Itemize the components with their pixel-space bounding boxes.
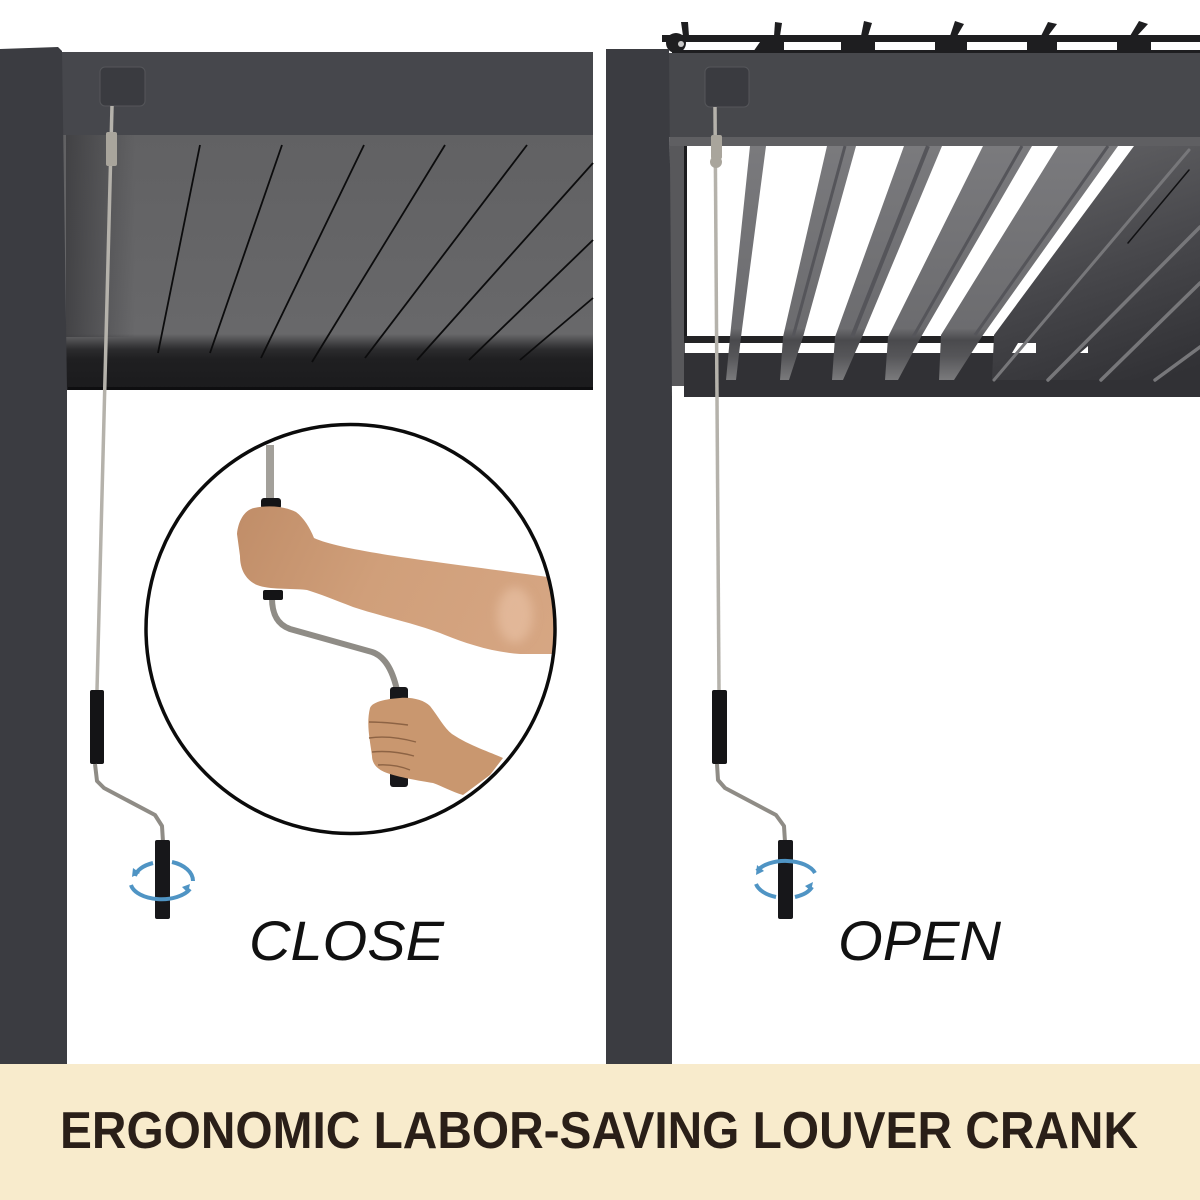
upper grip	[712, 690, 727, 764]
label: close: CLOSE	[249, 909, 445, 972]
crank rod	[715, 107, 719, 690]
crank arm	[717, 764, 785, 842]
lower grip	[390, 687, 408, 787]
label: open: OPEN	[838, 909, 1002, 972]
open louver slats	[670, 137, 1200, 397]
swivel hook	[106, 132, 117, 166]
crank mount box	[100, 67, 145, 106]
icon: rotation arrows	[131, 862, 193, 899]
lower grip	[155, 840, 170, 919]
footer banner	[0, 1064, 1200, 1200]
crank cap mid	[263, 590, 283, 600]
crank arm	[95, 764, 163, 842]
icon: rotation arrows	[756, 861, 815, 897]
crank bend	[272, 598, 397, 690]
panel: closed louver pergola	[0, 47, 593, 1064]
elbow shade	[497, 587, 533, 643]
crank rod	[97, 106, 112, 690]
top beam	[667, 53, 1200, 137]
finger lines	[369, 722, 416, 770]
lower hand	[368, 698, 503, 795]
top beam	[62, 52, 593, 135]
closed louver roof panel	[62, 135, 593, 390]
lower grip	[778, 840, 793, 919]
left post	[606, 49, 672, 1064]
swivel hook	[710, 135, 722, 168]
crank cap top	[261, 498, 281, 508]
heading: ERGONOMIC LABOR-SAVING LOUVER CRANK	[60, 1102, 1138, 1160]
top linkage rail	[662, 21, 1200, 53]
upper grip	[90, 690, 104, 764]
crank assembly: close side	[90, 106, 193, 919]
crank shaft	[266, 445, 274, 499]
crank mount box	[705, 67, 749, 107]
crank assembly: open side	[710, 107, 815, 919]
upper arm and fist	[237, 506, 562, 654]
left post	[0, 47, 67, 1064]
panel: open louver pergola	[606, 21, 1200, 1064]
circle outline	[146, 424, 555, 834]
callout: hands turning crank circle	[146, 424, 562, 834]
